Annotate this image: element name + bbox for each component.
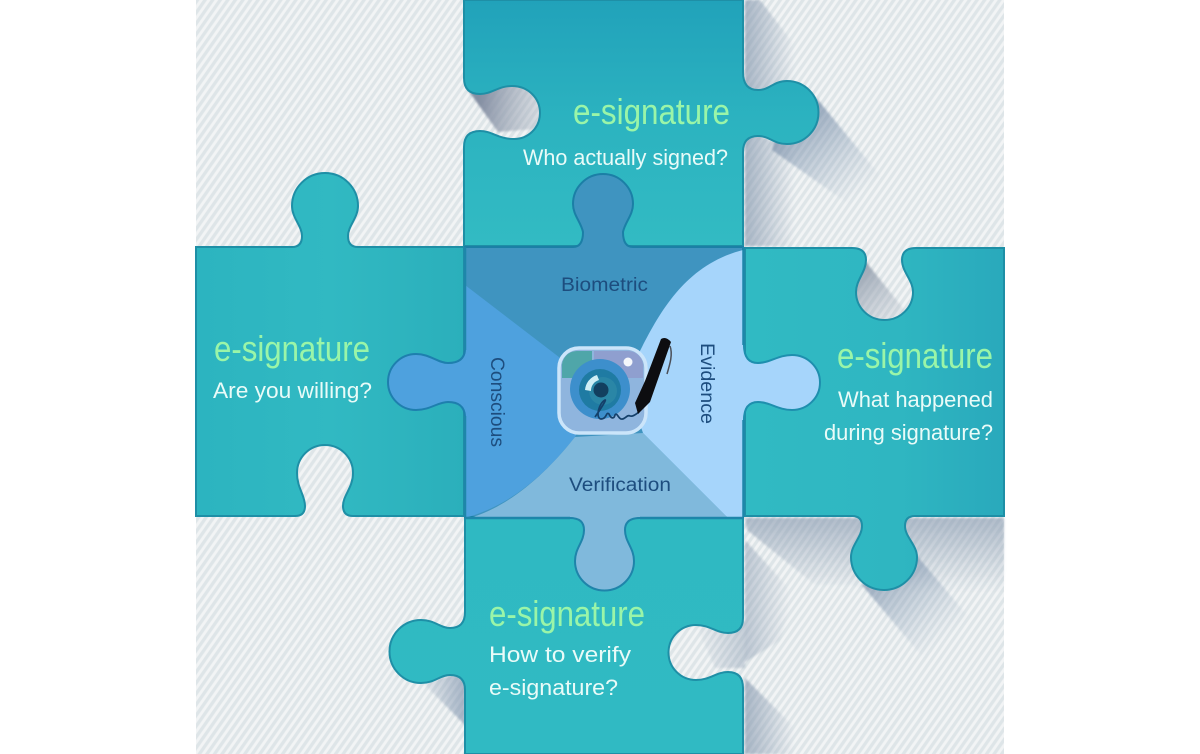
label: Verification: Verification	[569, 475, 671, 496]
text block: bottom piece: How to verify	[489, 642, 631, 667]
label: Conscious: Conscious	[486, 357, 507, 447]
segment: evidence	[625, 250, 820, 517]
center frame	[465, 247, 744, 518]
text block: right piece	[824, 335, 993, 445]
text block: right piece: What happened	[838, 387, 993, 412]
tab and piece shadows	[423, 0, 1004, 754]
text block: top piece	[523, 91, 730, 170]
segment: conscious	[388, 285, 602, 517]
background: striped panel	[196, 0, 1004, 754]
pen	[635, 338, 671, 414]
label: Evidence: Evidence	[696, 343, 717, 424]
icon: camera with pen and signature	[559, 338, 671, 433]
center square with four segments	[388, 174, 820, 590]
text block: top piece: Who actually signed?	[523, 145, 728, 170]
puzzle piece: left	[196, 173, 464, 516]
text block: bottom piece	[489, 593, 645, 700]
text block: right piece: e-signature	[837, 335, 993, 376]
text block: top piece: e-signature	[573, 91, 730, 132]
text block: bottom piece: e-signature?	[489, 675, 618, 700]
text block: bottom piece: e-signature	[489, 593, 645, 634]
text block: right piece: during signature?	[824, 420, 993, 445]
puzzle piece: top	[464, 0, 819, 246]
tab outline right	[744, 345, 820, 420]
tab outline bottom	[570, 518, 640, 590]
text block: left piece: Are you willing?	[213, 378, 372, 403]
puzzle piece: right	[745, 248, 1004, 590]
segment: verification	[473, 433, 727, 590]
segment: biometric	[465, 174, 743, 517]
label: Biometric: Biometric	[561, 275, 648, 296]
text block: left piece	[213, 328, 372, 403]
text block: left piece: e-signature	[214, 328, 370, 369]
puzzle piece: bottom	[390, 518, 743, 754]
tab outline left	[388, 350, 465, 416]
